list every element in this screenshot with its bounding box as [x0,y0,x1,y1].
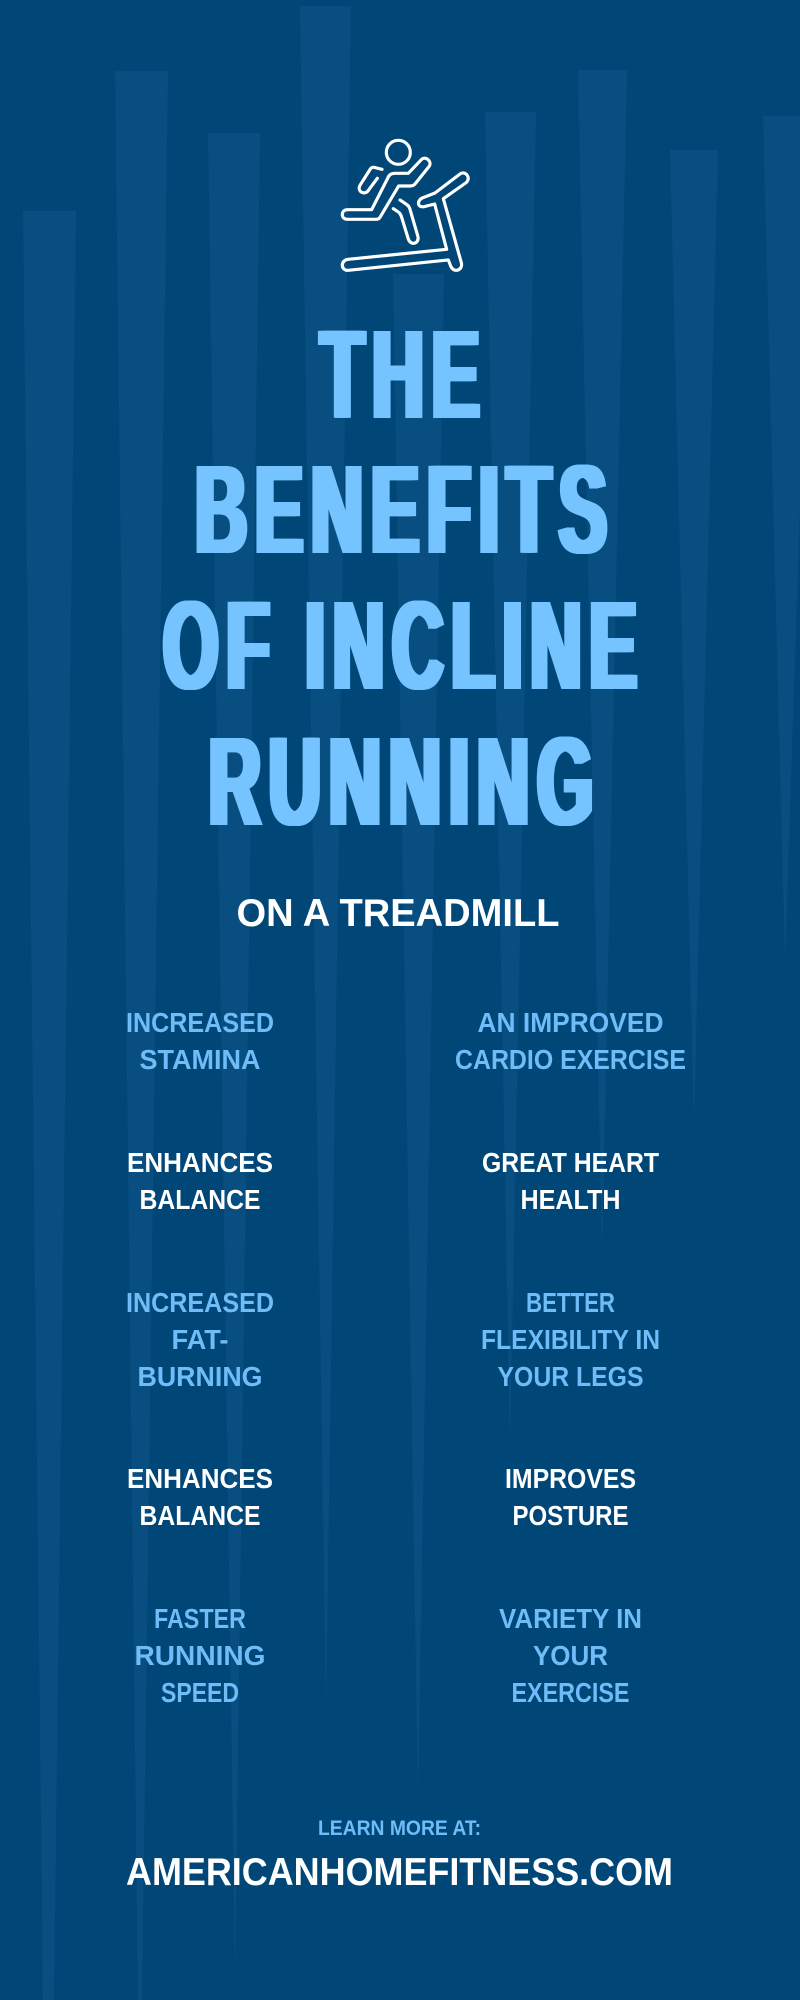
item: increased fat-burning [126,1287,274,1392]
item: faster running speed: FASTER [154,1603,246,1634]
footer: learn more call to action: LEARN MORE AT: [318,1817,481,1840]
item: an improved cardio exercise: CARDIO EXERCISE [455,1044,686,1075]
item: enhances balance: BALANCE [140,1184,260,1215]
item: faster running speed: SPEED [161,1677,239,1708]
item: better flexibility in your legs [481,1287,660,1392]
item: increased fat-burning: FAT- [172,1324,228,1355]
item: great heart health [482,1147,659,1215]
item: an improved cardio exercise [455,1007,686,1075]
footer: learn more call to action: AMERICANHOMEFITNESS.COM [126,1851,673,1894]
title: RUNNING [209,711,601,852]
item: improves posture: POSTURE [512,1500,628,1531]
item: variety in your exercise: EXERCISE [512,1677,630,1708]
item: increased stamina [126,1007,274,1075]
item: variety in your exercise: YOUR [533,1640,608,1671]
item: enhances balance: ENHANCES [127,1463,273,1494]
item: enhances balance: ENHANCES [127,1147,273,1178]
item: great heart health: GREAT HEART [482,1147,659,1178]
title: BENEFITS [195,439,615,580]
item: faster running speed [134,1603,266,1708]
item: improves posture: IMPROVES [505,1463,636,1494]
item: better flexibility in your legs: YOUR LEGS [498,1361,644,1392]
item: an improved cardio exercise: AN IMPROVED [478,1007,664,1038]
item: enhances balance: BALANCE [140,1500,260,1531]
icon: runner on treadmill [340,138,470,272]
item: enhances balance [127,1147,273,1215]
item: better flexibility in your legs: BETTER [526,1287,615,1318]
item: increased stamina: STAMINA [140,1044,260,1075]
item: better flexibility in your legs: FLEXIBILITY IN [481,1324,660,1355]
title: THE [320,304,487,445]
item: improves posture [505,1463,636,1531]
item: increased fat-burning: INCREASED [126,1287,274,1318]
item: faster running speed: RUNNING [134,1640,266,1671]
subtitle: ON A TREADMILL [236,892,560,935]
title: OF INCLINE [163,575,645,716]
item: enhances balance [127,1463,273,1531]
item: increased stamina: INCREASED [126,1007,274,1038]
item: increased fat-burning: BURNING [138,1361,262,1392]
item: variety in your exercise [499,1603,642,1708]
item: great heart health: HEALTH [520,1184,620,1215]
item: variety in your exercise: VARIETY IN [499,1603,642,1634]
